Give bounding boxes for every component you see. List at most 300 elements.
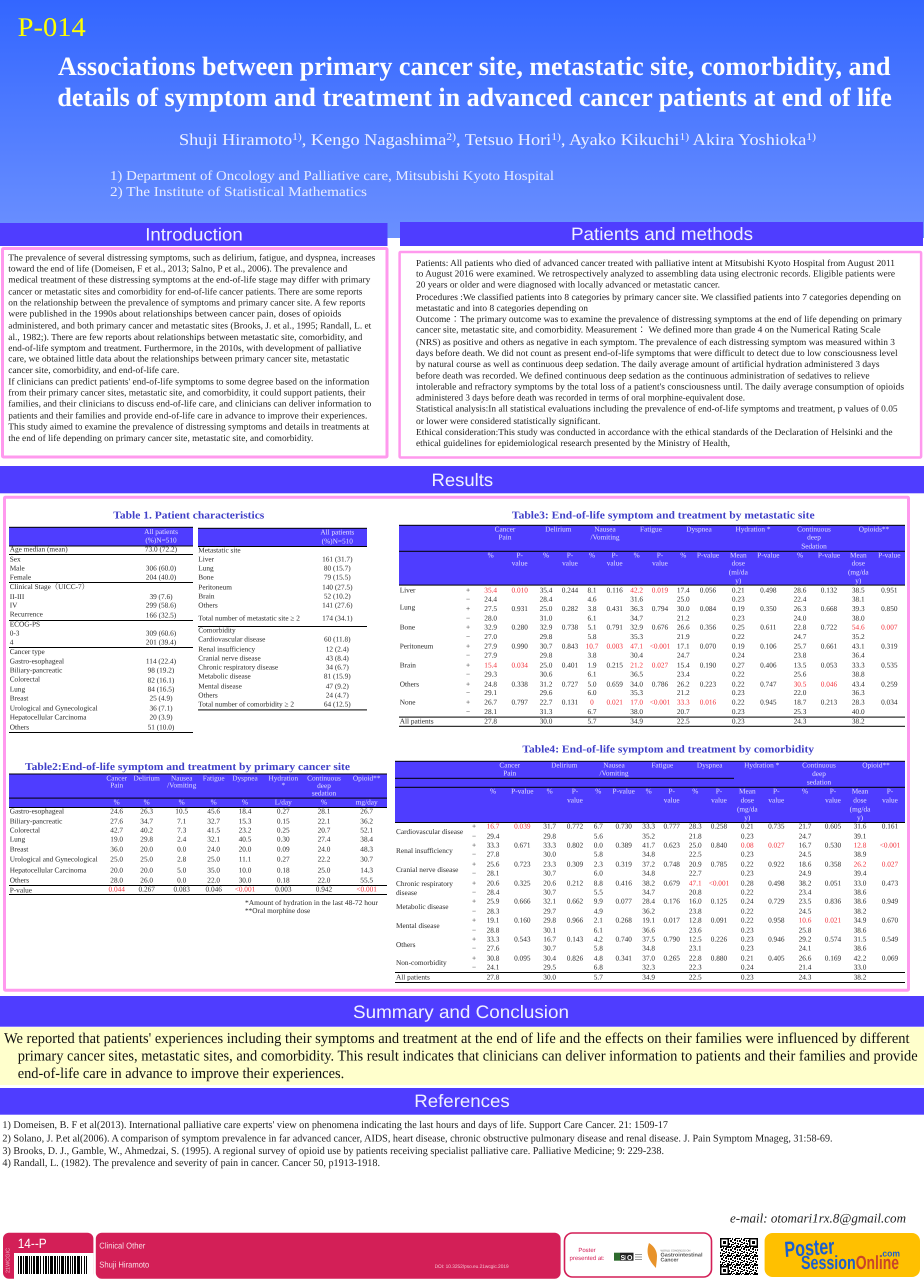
table 2 rows: 25.0 xyxy=(140,855,153,864)
table 2 rows: 5.0 xyxy=(177,866,187,875)
table 4 rows: 0.23 xyxy=(741,869,754,878)
icon: ESMO logo: SM xyxy=(620,1255,631,1262)
table 4 rows: <0.001 xyxy=(880,841,901,850)
table 3 rows: − xyxy=(466,669,470,678)
table 4 header: P- xyxy=(572,787,579,796)
table 3 header xyxy=(488,525,900,585)
table 4 rows: 0.24 xyxy=(741,963,754,972)
table 4 rows: 22.8 xyxy=(689,954,702,963)
table 3 rows: 0 xyxy=(590,697,594,706)
introduction text xyxy=(8,253,376,443)
table 4 header: Nausea xyxy=(603,761,625,770)
table 2 rows: 10.0 xyxy=(239,866,252,875)
table 2 header: Continuous xyxy=(307,774,341,783)
table 4 rows: − xyxy=(472,963,476,972)
table 3 rows: 13.5 xyxy=(794,660,807,669)
table 4 rows: 0.748 xyxy=(663,860,680,869)
table 1 left column: 0-3 xyxy=(10,628,20,637)
table 1 right column: Chronic respiratory disease xyxy=(198,663,278,672)
table 3 rows: 26.2 xyxy=(677,679,690,688)
table 2 rows: 24.6 xyxy=(110,807,123,816)
table 3 rows: 34.7 xyxy=(630,613,643,622)
table 3 rows: 35.3 xyxy=(630,632,643,641)
table 4 rows: 26.6 xyxy=(799,954,812,963)
table 3 rows: 0.22 xyxy=(732,669,745,678)
table 3 rows: 27.5 xyxy=(484,604,497,613)
table 3 rows: 22.0 xyxy=(794,688,807,697)
table 4 rows: 21.4 xyxy=(799,963,812,972)
methods text: before death was recorded. We defined continuous deep sedation as the continuous administration of sedatives to relieve xyxy=(416,371,870,381)
table 2 rows: 2.8 xyxy=(177,855,187,864)
methods text: administered 3 days before death was recorded in terms of oral morphine-equivalent dose. xyxy=(416,392,745,402)
table 1 left column: 4 xyxy=(10,637,14,646)
table 3 rows: 15.4 xyxy=(677,660,690,669)
table 4 rows: 0.21 xyxy=(741,822,754,831)
table 4 rows: 0.949 xyxy=(882,897,899,906)
table 4 rows: 16.7 xyxy=(543,935,556,944)
table 1 right column: 34 (6.7) xyxy=(326,663,349,672)
table 3 rows: 0.797 xyxy=(511,697,528,706)
table 2 rows: 27.6 xyxy=(110,817,123,826)
table 2 header: deep xyxy=(317,781,331,790)
table 3 rows: Bone xyxy=(400,622,415,631)
table 3 rows: 0.27 xyxy=(732,660,745,669)
table 4 rows: 33.0 xyxy=(854,879,867,888)
table 1 right column: 52 (10.2) xyxy=(324,592,351,601)
table 3 header: P-value xyxy=(818,550,840,559)
table 4 rows: 38.6 xyxy=(854,943,867,952)
table 4 rows: 32.3 xyxy=(642,963,655,972)
table 3 rows: 0.22 xyxy=(732,697,745,706)
table 3 rows: 0.659 xyxy=(606,679,623,688)
references list: 4) Randall, L. (1982). The prevalence and severity of pain in cancer. Cancer 50, p1913-1918. xyxy=(2,1158,380,1169)
table 1 left column: Clinical Stage（UICC-7） xyxy=(10,582,89,591)
table 2 rows: Gastro-esophageal xyxy=(10,807,64,816)
table 4 rows: 29.4 xyxy=(487,832,500,841)
table 3 rows: 27.0 xyxy=(484,632,497,641)
table 3 rows: 0.190 xyxy=(700,660,717,669)
table 3 rows: 21.2 xyxy=(677,688,690,697)
table 3 header: % xyxy=(634,550,640,559)
table 3 rows: 0.951 xyxy=(881,585,898,594)
table 1 left column: Female xyxy=(10,573,31,582)
table 3 rows: 0.431 xyxy=(606,604,623,613)
poster number: P-014 xyxy=(18,12,86,42)
table 4 header: Dyspnea xyxy=(697,761,723,770)
table 4 rows: 30.7 xyxy=(543,888,556,897)
congress name: Cancer xyxy=(660,1258,678,1264)
table 3 rows: 25.3 xyxy=(794,707,807,716)
table 4 rows: 12.8 xyxy=(854,841,867,850)
table 3 rows: 25.0 xyxy=(677,594,690,603)
table 4 rows: 28.8 xyxy=(487,926,500,935)
table 3 rows: 29.8 xyxy=(540,632,553,641)
table 3 rows: 24.7 xyxy=(677,650,690,659)
table 2 header: L/day xyxy=(275,798,292,807)
table 4 rows: 0.23 xyxy=(741,972,754,981)
table 4 rows: 0.549 xyxy=(882,935,899,944)
table 4 rows: 18.6 xyxy=(799,860,812,869)
table 3 rows: 0.070 xyxy=(700,641,717,650)
table 3 rows: 31.6 xyxy=(630,594,643,603)
table 4 rows: 47.1 xyxy=(689,879,702,888)
table 4 header: value xyxy=(664,796,680,805)
table 3 rows: Liver xyxy=(400,585,416,594)
table 4 rows: 2.1 xyxy=(594,916,603,925)
table 4 rows: 0.22 xyxy=(741,907,754,916)
table 4 header: % xyxy=(646,787,652,796)
table 4 rows: 0.416 xyxy=(615,879,632,888)
table 3 rows: 0.23 xyxy=(732,716,745,725)
table 4 rows: 29.8 xyxy=(543,832,556,841)
table 4 rows: + xyxy=(472,897,476,906)
table 3 rows: − xyxy=(466,632,470,641)
table 3 header: Delirium xyxy=(545,525,572,534)
affiliations: 2) The Institute of Statistical Mathematics xyxy=(110,184,367,199)
table 2 rows: Hepatocellular Carcinoma xyxy=(10,866,87,875)
table 2 header: sedation xyxy=(312,789,337,798)
table 2 header: % xyxy=(242,798,248,807)
table 3 rows: 30.6 xyxy=(540,669,553,678)
table 4 rows: 36.2 xyxy=(642,907,655,916)
table 4 header: Cancer xyxy=(499,761,521,770)
table 3 rows: 30.7 xyxy=(540,641,553,650)
table 1 left column: 309 (60.6) xyxy=(146,628,177,637)
title xyxy=(57,51,892,112)
table 4 rows: 0.0 xyxy=(594,841,603,850)
table 2 rows: 26.0 xyxy=(140,876,153,885)
table 4 rows: 20.8 xyxy=(689,888,702,897)
table 2 rows: Lung xyxy=(10,835,25,844)
table 4 rows: 0.498 xyxy=(768,879,785,888)
table 3 rows: 35.4 xyxy=(540,585,553,594)
introduction text: cancer or metastatic sites and comorbidity for end-of-life cancer patients. There are some reports xyxy=(8,287,363,297)
table 4 header: % xyxy=(692,787,698,796)
table 3 rows: 0.498 xyxy=(760,585,777,594)
table 3 rows: 0.003 xyxy=(606,641,623,650)
table 4 rows: 33.0 xyxy=(854,963,867,972)
table 3 header: P- xyxy=(567,550,574,559)
table 3 header: Opioids** xyxy=(859,525,890,534)
table 4 rows: 33.3 xyxy=(487,841,500,850)
heading: summary and conclusion: Summary and Conclusion xyxy=(353,1002,569,1022)
table 1 left column: Cancer type xyxy=(10,647,45,656)
table 4 rows: + xyxy=(472,860,476,869)
table 3 rows: 32.9 xyxy=(630,622,643,631)
table 2 header: Opioid** xyxy=(353,774,381,783)
footer: PosterSessionOnline logo: Online xyxy=(856,1253,899,1274)
table 3 rows: 0.132 xyxy=(821,585,838,594)
table 4 rows: 0.23 xyxy=(741,935,754,944)
table 2 rows: 25.0 xyxy=(207,855,220,864)
table 3 rows: 0.106 xyxy=(760,641,777,650)
table 4 rows: 31.6 xyxy=(854,822,867,831)
table 3 header: dose xyxy=(732,559,745,568)
table 4 rows: + xyxy=(472,935,476,944)
table 3 rows: 27.9 xyxy=(484,650,497,659)
table 1 right column: Brain xyxy=(198,592,215,601)
table 4 rows: − xyxy=(472,849,476,858)
table 3 header: value xyxy=(607,559,623,568)
table 3 rows: 0.786 xyxy=(652,679,669,688)
table 1 left column: Male xyxy=(10,564,25,573)
table 3 rows: Peritoneum xyxy=(400,641,434,650)
table 4 rows: 23.1 xyxy=(689,943,702,952)
table 3 rows: 27.9 xyxy=(484,641,497,650)
table 2 rows: Biliary-pancreatic xyxy=(10,817,63,826)
table 1 left column: ECOG-PS xyxy=(10,620,40,629)
table 4 rows: 30.4 xyxy=(543,954,556,963)
authors: 1) xyxy=(679,132,690,143)
table 4 rows: 0.22 xyxy=(741,916,754,925)
table 3 rows: 26.6 xyxy=(677,622,690,631)
table 3 rows: + xyxy=(466,604,470,613)
table 4 rows: 32.1 xyxy=(543,897,556,906)
table 3 rows: + xyxy=(466,660,470,669)
table 2 rows: 22.0 xyxy=(318,876,331,885)
table 3 rows: 5.1 xyxy=(587,622,597,631)
table 3 rows: 0.034 xyxy=(881,697,898,706)
table 2 header: mg/day xyxy=(356,798,378,807)
table 2 header: Nausea xyxy=(171,774,193,783)
references list: 3) Brooks, D. J., Gamble, W., Ahmedzai, S. (1995). A regional survey of opioid use by patients receiving specialist palliative care. Palliative Medicine; 9: 229-238. xyxy=(2,1146,664,1157)
authors: 1) xyxy=(292,132,302,143)
table 1 right column: Liver xyxy=(198,555,215,564)
table 4 rows: + xyxy=(472,879,476,888)
table 4 rows: 0.389 xyxy=(615,841,632,850)
table 3 rows: 38.2 xyxy=(852,716,865,725)
authors: , Ayako Kikuchi xyxy=(561,130,680,149)
table 3 rows: 0.22 xyxy=(732,632,745,641)
table 2 rows: 0.0 xyxy=(177,876,187,885)
footer: presented at box: presented at: xyxy=(569,1255,605,1262)
table 3 rows: 27.8 xyxy=(484,716,497,725)
table 2 header: % xyxy=(179,798,185,807)
table 2 rows: <0.001 xyxy=(235,884,256,894)
table 4 rows: 20.9 xyxy=(689,860,702,869)
table 4 rows: 29.8 xyxy=(543,916,556,925)
table 4 header: value xyxy=(711,796,727,805)
congress name: Gastrointestinal xyxy=(660,1253,703,1259)
table 3 rows: 34.9 xyxy=(630,716,643,725)
table 1 right column: 24 (4.7) xyxy=(326,691,349,700)
methods text: metastatic and into 8 categories depending on xyxy=(416,303,588,313)
methods text: or lower were considered statistically significant. xyxy=(416,416,600,426)
table 2 rows: Breast xyxy=(10,845,28,854)
table 2 rows: 0.18 xyxy=(277,876,290,885)
table 4 rows: 0.772 xyxy=(567,822,584,831)
table 2 rows: 0.046 xyxy=(205,884,222,894)
table 1 left column: Urological and Gynecological xyxy=(10,704,98,713)
table 4 rows: 0.212 xyxy=(567,879,584,888)
table 3 rows: <0.001 xyxy=(650,697,671,706)
table 4 rows: 0.662 xyxy=(567,897,584,906)
table 4 rows: 0.623 xyxy=(663,841,680,850)
authors: 1) xyxy=(551,132,561,143)
table 4 rows: 0.735 xyxy=(768,822,785,831)
table 4 rows: Mental disease xyxy=(396,921,440,930)
table 4 rows: 29.5 xyxy=(543,963,556,972)
table 3 rows: 0.019 xyxy=(652,585,669,594)
table 3 header: P-value xyxy=(757,550,779,559)
introduction text: toward the end of life (Domeisen, F et al., 2013; Salno, P et al., 2006). The prevalence and xyxy=(8,264,348,274)
table 4 rows: 35.2 xyxy=(642,832,655,841)
table 4 rows: 30.7 xyxy=(543,943,556,952)
table 3 rows: <0.001 xyxy=(650,641,671,650)
table 4 rows: 23.6 xyxy=(689,926,702,935)
table 2 rows: 36.0 xyxy=(110,845,123,854)
table 4 rows: 0.161 xyxy=(882,822,899,831)
heading: patients and methods: Patients and methods xyxy=(571,224,753,244)
table 3 header: % xyxy=(543,550,549,559)
table 3 header: deep xyxy=(807,533,821,542)
table 3 rows: 28.6 xyxy=(794,585,807,594)
table 4 header: deep xyxy=(812,769,826,778)
table 3 rows: 3.8 xyxy=(587,650,597,659)
table 4 header: Delirium xyxy=(551,761,578,770)
table 4 rows: 16.0 xyxy=(689,897,702,906)
table 3 rows: 0.794 xyxy=(652,604,669,613)
introduction text: administered, and both primary cancer and metastatic sites (Brooks, J. et al., 1995; Randall, L. et xyxy=(8,321,372,331)
panel: introduction xyxy=(2,248,387,457)
table 3 rows: − xyxy=(466,594,470,603)
references list xyxy=(2,1120,833,1169)
introduction text: The prevalence of several distressing symptoms, such as delirium, fatigue, and dyspnea, increases xyxy=(8,253,376,263)
table 4 rows: Metabolic disease xyxy=(396,902,448,911)
table 3 rows: 0.747 xyxy=(760,679,777,688)
barcode xyxy=(18,1256,89,1274)
footer: poster info bar: Shuji Hiramoto xyxy=(99,1260,150,1270)
table 4 header: % xyxy=(547,787,553,796)
table 4 rows: 23.5 xyxy=(799,897,812,906)
table 2 rows: 55.5 xyxy=(360,876,373,885)
table 4 header: Continuous xyxy=(802,761,836,770)
table 3 rows: 21.9 xyxy=(677,632,690,641)
table 2 rows: 14.3 xyxy=(360,866,373,875)
table 3 header: (ml/da xyxy=(729,567,749,576)
table 2 header: Pain xyxy=(110,780,124,789)
table 2 rows: 0.25 xyxy=(277,826,290,835)
table 3 rows: 0.027 xyxy=(652,660,669,669)
panel: summary and conclusion: We reported that patients' experiences including their symptoms and treatment at the end of life and the effects on their families were influenced by different xyxy=(4,1031,910,1047)
table 2 rows: 0.942 xyxy=(316,884,333,894)
table 4 rows xyxy=(396,822,901,981)
table 4 rows: 25.0 xyxy=(689,841,702,850)
table 2 rows: 18.4 xyxy=(239,807,252,816)
table 3 rows: 0.24 xyxy=(732,650,745,659)
table 3 rows: 35.2 xyxy=(852,632,865,641)
table 4 rows: 0.309 xyxy=(567,860,584,869)
table 4 rows: 30.1 xyxy=(543,926,556,935)
table 2 rows: 52.1 xyxy=(360,826,373,835)
table 4 rows: 27.8 xyxy=(487,972,500,981)
introduction text: al., 1982;). There are few reports about relationships between metastatic site, comorbidity, and xyxy=(8,332,363,342)
table 3 rows: 3.8 xyxy=(587,604,597,613)
table 1 left column: 204 (40.0) xyxy=(146,573,177,582)
table 4 rows: 28.3 xyxy=(487,907,500,916)
table 1 right column: (%)N=510 xyxy=(322,536,353,545)
table 3 rows: 25.0 xyxy=(540,660,553,669)
table 4 header: % xyxy=(595,787,601,796)
table 1 left column: IV xyxy=(10,601,18,610)
panel: summary and conclusion: end-of-life care in advance to improve their experiences. xyxy=(18,1066,344,1082)
affiliations: 1) Department of Oncology and Palliative care, Mitsubishi Kyoto Hospital xyxy=(110,168,554,183)
table 2 rows: 22.2 xyxy=(318,855,331,864)
table 3 rows: 0.945 xyxy=(760,697,777,706)
table 4 header: dose xyxy=(741,796,754,805)
table 3 rows: 0.722 xyxy=(821,622,838,631)
table 1 right column: Others xyxy=(198,601,218,610)
table 1 left column: Hepatocellular Carcinoma xyxy=(10,713,87,722)
authors: Akira Yoshioka xyxy=(689,130,807,149)
table 4 rows: 0.021 xyxy=(825,916,842,925)
table 3 rows: 0.727 xyxy=(562,679,579,688)
table 4 rows: 38.2 xyxy=(854,972,867,981)
table 4 rows: 23.4 xyxy=(799,888,812,897)
table 4 rows: 24.1 xyxy=(487,963,500,972)
table 3 rows: 38.5 xyxy=(852,585,865,594)
table 4 rows: + xyxy=(472,822,476,831)
table 1 right column: 80 (15.7) xyxy=(324,564,351,573)
table 4 rows: 23.8 xyxy=(689,907,702,916)
table 1 title: Table 1. Patient characteristics xyxy=(113,510,264,521)
table 4 rows: 0.922 xyxy=(768,860,785,869)
table 4 header: y) xyxy=(744,813,751,822)
table 4 rows: 16.7 xyxy=(487,822,500,831)
congress name: WORLD CONGRESS ON xyxy=(660,1250,690,1252)
table 4 rows: 0.258 xyxy=(711,822,728,831)
table 1 left column: All patients xyxy=(144,527,178,536)
introduction text: from their primary cancer sites, metastatic site, and comorbidity, it could support patients, their xyxy=(8,388,365,398)
table 2 rows: 34.7 xyxy=(140,817,153,826)
table 4 rows: 39.4 xyxy=(854,869,867,878)
table 3 title: Table3: End-of-life symptom and treatment by metastatic site xyxy=(512,511,815,522)
table 4 title: Table4: End-of-life symptom and treatment by comorbidity xyxy=(522,745,815,756)
table 4 rows: 26.2 xyxy=(854,860,867,869)
table 3 rows: 4.6 xyxy=(587,594,597,603)
table 4 rows: 4.2 xyxy=(594,935,603,944)
table 3 rows: 15.4 xyxy=(484,660,497,669)
table 2 rows: 20.0 xyxy=(110,866,123,875)
table 1 right column: 79 (15.5) xyxy=(324,573,351,582)
table 4 header: sedation xyxy=(807,778,832,787)
table 3 rows: 29.8 xyxy=(540,650,553,659)
table 1 right column: 141 (27.6) xyxy=(322,601,353,610)
table 2 rows: 26.7 xyxy=(360,807,373,816)
table 1 left column: 114 (22.4) xyxy=(146,657,177,666)
table 3 rows: 22.4 xyxy=(794,594,807,603)
table 3 rows: 18.7 xyxy=(794,697,807,706)
table 2 header: % xyxy=(114,798,120,807)
table 4 rows: 29.7 xyxy=(543,907,556,916)
table 3 rows: 29.6 xyxy=(540,688,553,697)
table 1 right column: Cranial nerve disease xyxy=(198,654,261,663)
table 4 rows: 0.027 xyxy=(882,860,899,869)
table 1 right column: All patients xyxy=(320,528,354,537)
table 4 rows: 24.1 xyxy=(799,943,812,952)
table 4 rows: 22.5 xyxy=(689,972,702,981)
table 4 rows: 0.325 xyxy=(514,879,531,888)
table 1 right column xyxy=(198,528,367,710)
table 3 rows: 36.3 xyxy=(630,604,643,613)
table 3 rows: 22.5 xyxy=(677,716,690,725)
table 4 rows: Others xyxy=(396,940,416,949)
table 3 rows: 17.1 xyxy=(677,641,690,650)
table 4 rows: 12.8 xyxy=(689,916,702,925)
methods text: Statistical analysis:In all statistical evaluations including the prevalence of end-of-life symptoms and treatment, p values of 0.05 xyxy=(416,404,898,414)
table 4 rows: 0.405 xyxy=(768,954,785,963)
table 4 header: dose xyxy=(853,796,867,805)
